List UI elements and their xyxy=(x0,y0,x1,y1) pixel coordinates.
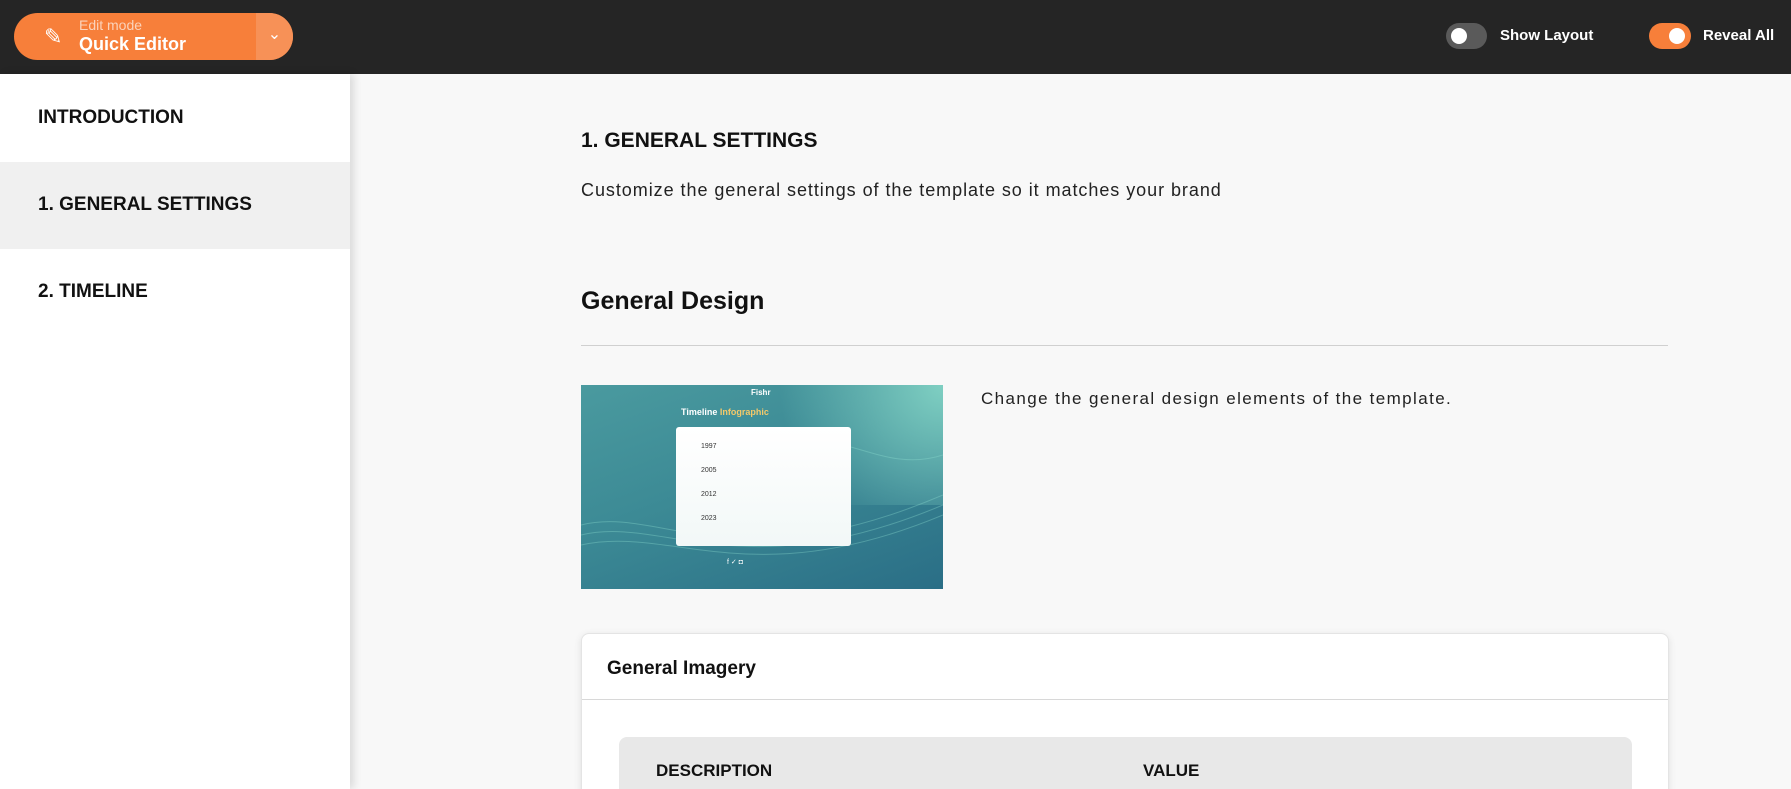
toggle: reveal all: Reveal All xyxy=(1703,27,1774,44)
table header: DESCRIPTION xyxy=(656,761,772,780)
table header: VALUE xyxy=(1143,761,1199,780)
edit mode button: ⌄ xyxy=(268,26,281,43)
nav: general settings (active) xyxy=(0,162,350,249)
template preview image: f ✓ ◘ xyxy=(727,559,743,566)
toggle: show layout: Show Layout xyxy=(1500,27,1593,44)
heading: general design: General Design xyxy=(581,287,764,315)
template preview image: 2012 xyxy=(701,491,717,498)
design description: Change the general design elements of the template. xyxy=(981,389,1452,408)
template preview image: 2023 xyxy=(701,515,717,522)
section heading: 1. GENERAL SETTINGS xyxy=(581,129,818,152)
template preview image: Timeline Infographic xyxy=(681,407,769,417)
toggle: show layout xyxy=(1446,23,1594,49)
edit mode button: Quick Editor xyxy=(79,34,186,54)
template preview image: 2005 xyxy=(701,467,717,474)
nav: introduction: INTRODUCTION xyxy=(38,107,184,128)
table header xyxy=(619,737,1632,789)
section subtitle: Customize the general settings of the template so it matches your brand xyxy=(581,180,1222,200)
icon: magic wand: ✎ xyxy=(44,24,62,49)
card: general imagery xyxy=(581,633,1669,789)
card heading: General Imagery xyxy=(607,658,756,679)
edit mode button xyxy=(14,13,293,60)
nav: general settings (active): 1. GENERAL SETTINGS xyxy=(38,194,252,215)
sidebar xyxy=(0,74,350,789)
toggle: reveal all xyxy=(1649,23,1774,49)
template preview image xyxy=(581,385,943,589)
top bar xyxy=(0,0,1791,74)
edit mode button: Edit mode xyxy=(79,17,142,33)
template preview image: Fishr xyxy=(751,388,771,397)
nav: timeline: 2. TIMELINE xyxy=(38,281,148,302)
template preview image: 1997 xyxy=(701,443,717,450)
